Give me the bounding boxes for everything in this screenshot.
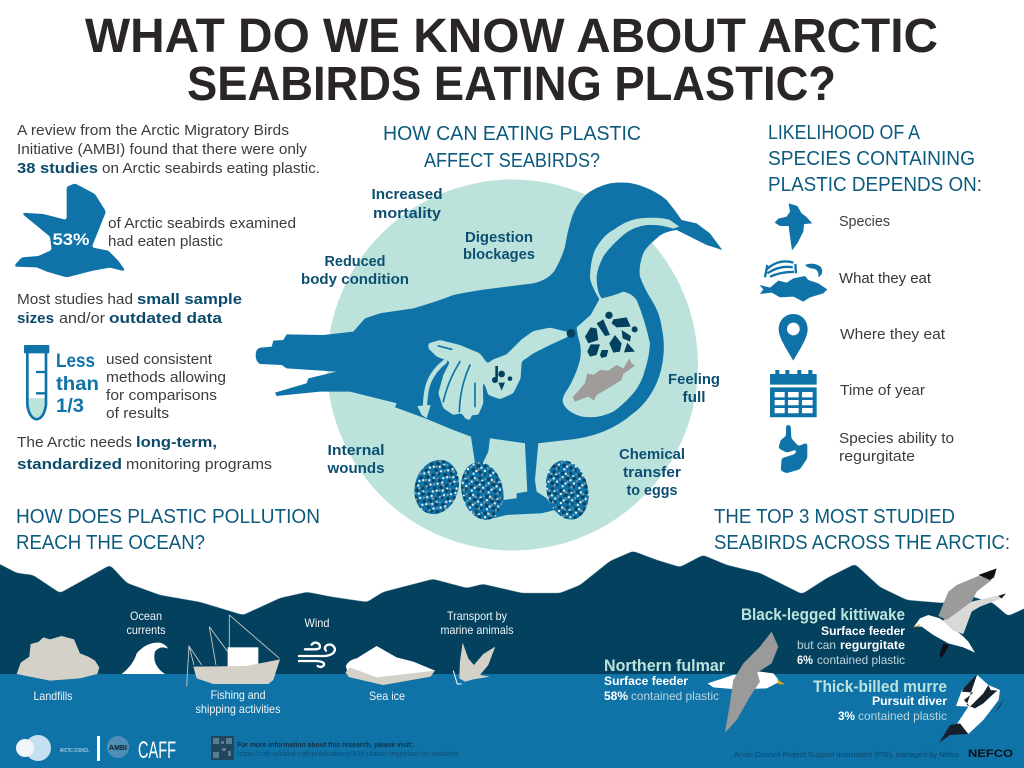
text: more information: https://caff.is/cbird-caff-publications/539-plastic-ingestion-by-seabirds	[237, 749, 459, 758]
heading: likelihood: LIKELIHOOD OF A	[768, 122, 921, 144]
mountains	[0, 551, 1024, 690]
text: 53 percent description: of Arctic seabirds examined	[108, 215, 296, 232]
icon: fishing boat	[187, 615, 280, 687]
icon: location pin	[779, 314, 808, 361]
text: regurgitate ability: Species ability to	[839, 430, 954, 447]
text: fulmar	[604, 657, 726, 703]
logo: CAFF: CAFF	[138, 737, 176, 764]
seabird anatomy diagram	[256, 182, 722, 524]
text: monitoring needed	[17, 434, 272, 473]
text: monitoring needed: standardized	[17, 456, 122, 473]
label: feeling full: Feeling	[668, 372, 720, 388]
text: more information	[237, 740, 459, 758]
text: small samples: Most studies had	[17, 291, 133, 308]
icon: calendar	[770, 370, 817, 417]
heading: how plastic reaches the ocean: HOW DOES PLASTIC POLLUTION	[16, 506, 320, 528]
text: sea ice: Sea ice	[369, 689, 405, 703]
icon: landfill	[17, 636, 99, 681]
heading: how can eating plastic affect seabirds: AFFECT SEABIRDS?	[424, 150, 600, 172]
panel: top studied seabirds	[604, 568, 1006, 743]
heading: how can eating plastic affect seabirds: HOW CAN EATING PLASTIC	[383, 123, 641, 145]
text: time of year: Time of year	[840, 382, 925, 399]
title: WHAT DO WE KNOW ABOUT ARCTIC	[85, 10, 938, 63]
label: increased mortality	[372, 187, 442, 222]
text: monitoring needed: The Arctic needs	[17, 434, 132, 451]
label: chemical transfer to eggs	[619, 447, 685, 499]
logo: AMBI: AMBI	[109, 745, 127, 752]
panel: pollution sources	[17, 609, 513, 716]
text: review intro: on Arctic seabirds eating plastic.	[102, 160, 320, 177]
label: feeling full	[668, 372, 720, 406]
footer logos	[16, 735, 1014, 764]
text: species: Species	[839, 213, 890, 230]
icon: wave	[122, 643, 168, 674]
QR code	[211, 736, 234, 760]
text: murre	[813, 678, 947, 723]
logo: NEFCO: NEFCO	[968, 748, 1014, 760]
text: consistent methods: of results	[106, 405, 169, 422]
plastic pieces in stomach	[492, 312, 638, 391]
text: fulmar: Northern fulmar	[604, 657, 726, 675]
heading: how plastic reaches the ocean	[16, 506, 320, 554]
heading: top 3 studied seabirds	[714, 506, 1010, 554]
heading: likelihood: PLASTIC DEPENDS ON:	[768, 174, 982, 196]
text: wind: Wind	[304, 616, 330, 630]
text: 53 percent description: had eaten plastic	[108, 233, 224, 250]
text: project support: Arctic Council Project Support Instrument (PSI), managed by Nefco	[734, 750, 959, 759]
text: small samples: outdated data	[109, 310, 223, 327]
icon: test tube	[24, 345, 49, 419]
label: reduced body condition	[301, 254, 409, 288]
text: less than one third: Less	[56, 350, 95, 372]
text: less than one third: 1/3	[56, 395, 84, 417]
label: digestion blockages: Digestion	[465, 230, 533, 246]
text: transport by marine animals: marine animals	[440, 623, 514, 637]
text: transport by marine animals: Transport by	[447, 609, 507, 623]
icon: crab shrimp fish	[759, 261, 827, 302]
text: kittiwake: contained plastic	[817, 653, 905, 667]
heading: top 3 studied seabirds: THE TOP 3 MOST STUDIED	[714, 506, 955, 528]
label: increased mortality: Increased	[372, 187, 442, 203]
heading: likelihood: SPECIES CONTAINING	[768, 148, 975, 170]
panel: study review facts	[13, 122, 320, 473]
label: internal wounds	[326, 443, 384, 477]
text: monitoring needed: long-term,	[136, 434, 217, 451]
label: chemical transfer to eggs: to eggs	[626, 483, 678, 499]
text: murre: contained plastic	[858, 709, 947, 723]
label: internal wounds: wounds	[326, 461, 384, 477]
text: fulmar: contained plastic	[631, 689, 719, 703]
text: small samples: and/or	[59, 310, 105, 327]
digestive tract	[417, 218, 679, 421]
icon: bird with plastic	[453, 643, 495, 684]
label: digestion blockages: blockages	[463, 247, 535, 263]
text: what they eat: What they eat	[839, 270, 932, 287]
text: review intro: A review from the Arctic Migratory Birds	[17, 122, 289, 139]
label: reduced body condition: Reduced	[324, 254, 386, 270]
heading: likelihood	[768, 122, 982, 196]
text: fishing and shipping	[196, 688, 280, 716]
label: increased mortality: mortality	[373, 206, 441, 222]
text: fulmar: 58%	[604, 689, 628, 703]
icon: stomach	[778, 425, 807, 473]
text: kittiwake	[741, 606, 905, 667]
text: murre: 3%	[838, 709, 855, 723]
text: kittiwake: regurgitate	[840, 638, 905, 652]
text: ocean currents: currents	[126, 623, 166, 637]
text: ocean currents	[126, 609, 166, 637]
text: murre: Pursuit diver	[872, 694, 947, 708]
label: chemical transfer to eggs: transfer	[623, 465, 681, 481]
icon: seabird with 53%	[13, 183, 126, 277]
text: kittiwake: Surface feeder	[821, 624, 905, 638]
text: small samples: sizes	[17, 310, 54, 327]
logo: AMBI	[107, 736, 129, 758]
logo: arctic council	[16, 735, 89, 761]
text: more information: For more information about this research, please visit:	[237, 740, 413, 749]
text: murre: Thick-billed murre	[813, 678, 947, 696]
text: kittiwake: but can	[797, 638, 836, 652]
label: feeling full: full	[682, 390, 706, 406]
label: digestion blockages	[463, 230, 535, 263]
ocean	[0, 674, 1024, 768]
icon: murre	[939, 674, 1004, 743]
text: consistent methods: used consistent	[106, 351, 213, 368]
heading: how can eating plastic affect seabirds	[383, 123, 641, 172]
label: chemical transfer to eggs: Chemical	[619, 447, 685, 463]
icon: wind	[299, 643, 335, 667]
label: reduced body condition: body condition	[301, 272, 409, 288]
fish in stomach	[573, 358, 635, 402]
text: fulmar: Surface feeder	[604, 674, 688, 688]
text: review intro	[17, 122, 320, 177]
text: small samples	[17, 291, 242, 327]
eggs	[407, 454, 595, 524]
text: ocean currents: Ocean	[130, 609, 162, 623]
text: fishing and shipping: Fishing and	[210, 688, 266, 702]
text: where they eat: Where they eat	[840, 326, 946, 343]
text: kittiwake: 6%	[797, 653, 813, 667]
text: transport by marine animals	[440, 609, 514, 637]
icon: species bird	[775, 203, 812, 250]
text: consistent methods: methods allowing	[106, 369, 226, 386]
text: fishing and shipping: shipping activities	[196, 702, 280, 716]
text: less than one third	[56, 350, 99, 417]
panel: likelihood factors	[759, 122, 982, 473]
text: regurgitate ability	[839, 430, 954, 465]
effects labels	[301, 187, 720, 499]
text: kittiwake: Black-legged kittiwake	[741, 606, 905, 624]
logo: arctic council: ARCTIC COUNCIL	[60, 748, 89, 754]
bird body	[256, 182, 722, 518]
text: review intro: Initiative (AMBI) found that there were only	[17, 141, 307, 158]
icon: seabird with 53%: 53%	[52, 230, 90, 249]
title	[85, 10, 938, 111]
text: less than one third: than	[56, 373, 99, 395]
text: review intro: 38 studies	[17, 160, 98, 177]
label: internal wounds: Internal	[328, 443, 384, 459]
icon: fulmar	[708, 632, 785, 733]
text: monitoring needed: monitoring programs	[126, 456, 272, 473]
text: regurgitate ability: regurgitate	[839, 448, 915, 465]
text: small samples: small sample	[137, 291, 242, 308]
background circle	[327, 180, 698, 550]
text: 53 percent description	[108, 215, 296, 250]
text: consistent methods: for comparisons	[106, 387, 217, 404]
text: landfills: Landfills	[34, 689, 72, 703]
title: SEABIRDS EATING PLASTIC?	[187, 58, 836, 111]
icon: sea ice	[345, 646, 435, 685]
icon: kittiwake	[913, 568, 1006, 658]
heading: how plastic reaches the ocean: REACH THE OCEAN?	[16, 532, 205, 554]
text: consistent methods	[106, 351, 226, 422]
